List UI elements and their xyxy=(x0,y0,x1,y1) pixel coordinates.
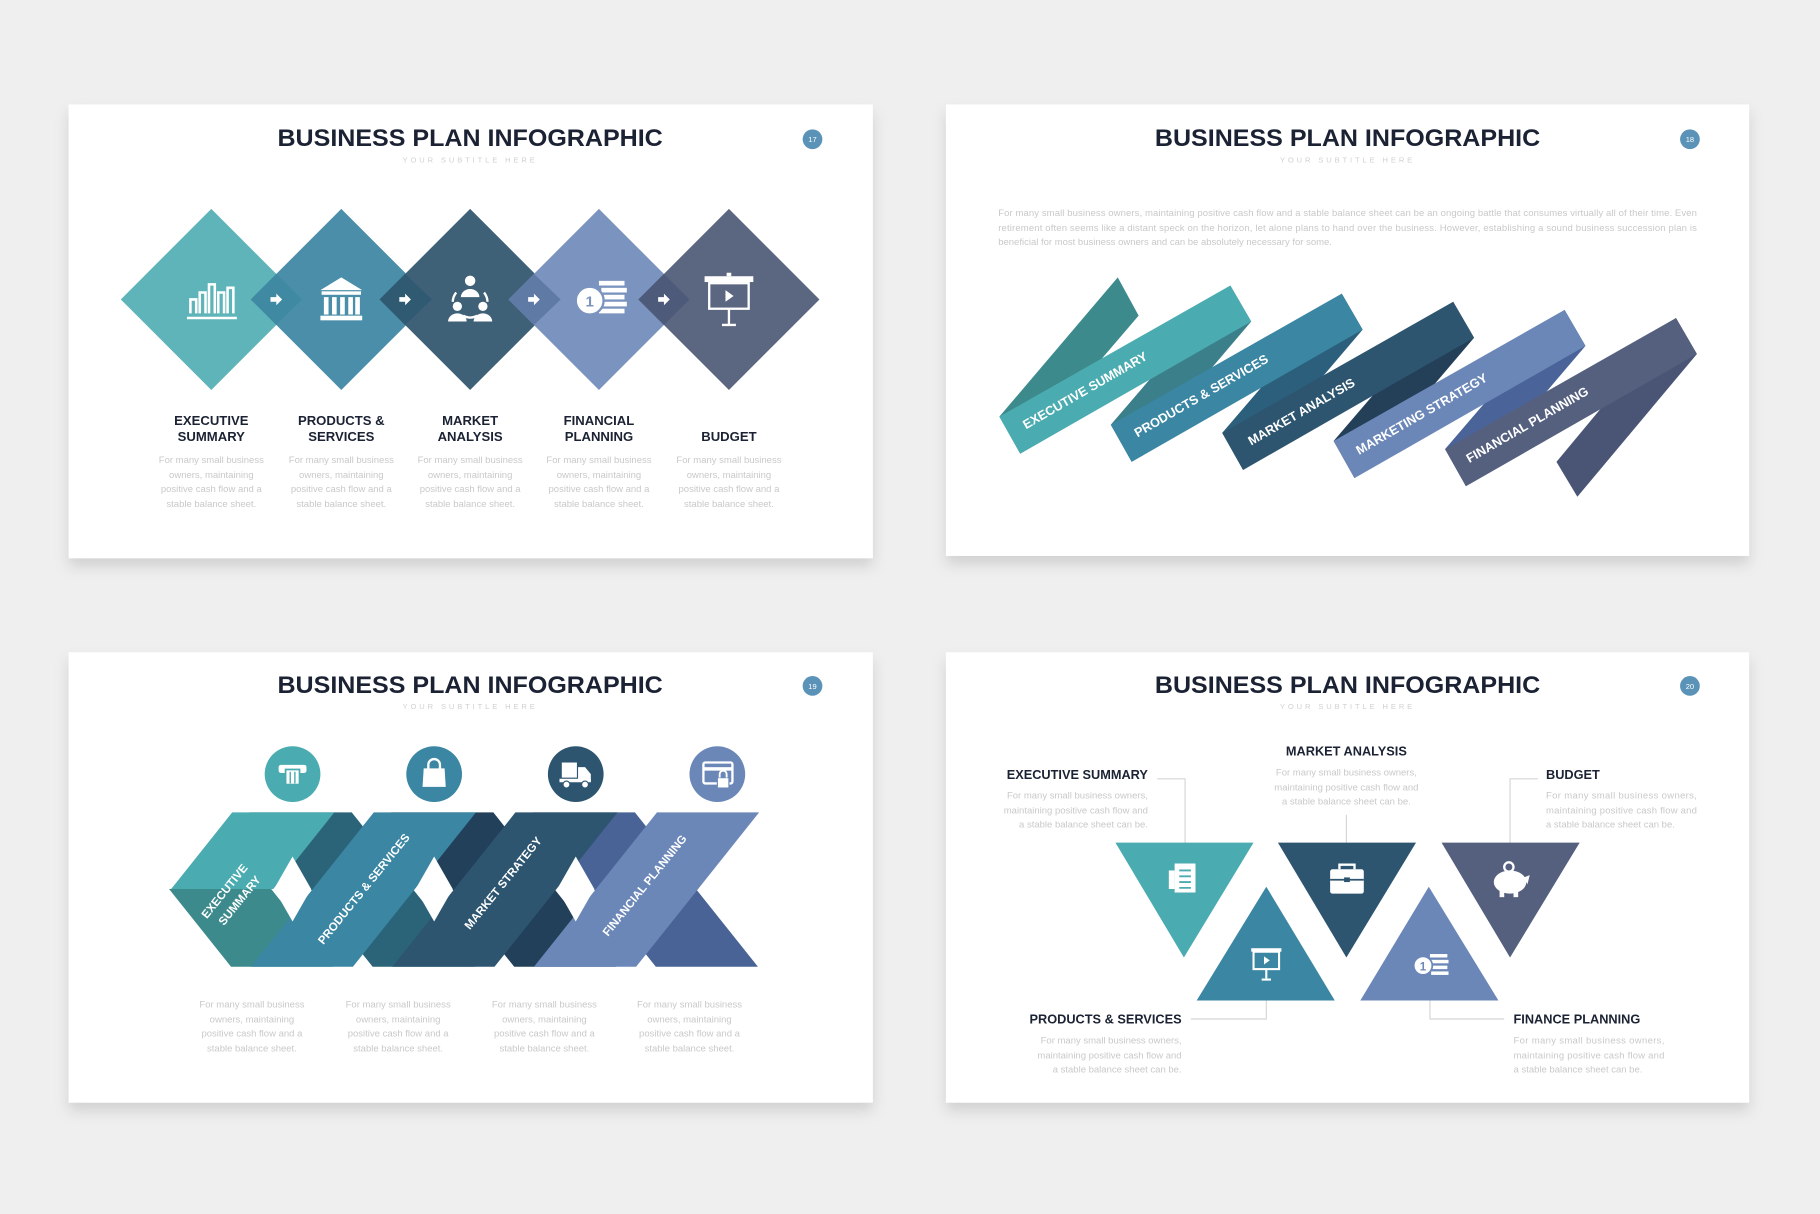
triangle: finance planning: 1 xyxy=(1420,960,1427,973)
arrows xyxy=(271,294,670,305)
label: finance planning: a stable balance sheet can be. xyxy=(1514,1064,1642,1075)
label: market analysis: a stable balance sheet can be. xyxy=(1282,796,1411,807)
label: executive summary: maintaining positive cash flow and xyxy=(1004,806,1148,817)
strip: executive summary: SUMMARY xyxy=(216,873,264,928)
title: BUSINESS PLAN INFOGRAPHIC xyxy=(277,125,663,152)
label: market analysis: MARKET ANALYSIS xyxy=(1286,744,1407,759)
panel: slide 20 triangles xyxy=(946,652,1749,1103)
step descriptions: stable balance sheet. xyxy=(425,499,515,510)
panel: slide 19 weave xyxy=(69,652,873,1103)
column descriptions: stable balance sheet. xyxy=(207,1044,297,1055)
page badge xyxy=(803,676,822,696)
column descriptions: owners, maintaining xyxy=(356,1014,440,1025)
step labels: EXECUTIVE xyxy=(174,413,249,428)
step descriptions: owners, maintaining xyxy=(428,470,512,481)
column descriptions: For many small business xyxy=(637,999,742,1010)
label: products & services: a stable balance sheet can be. xyxy=(1053,1064,1182,1075)
label: executive summary: For many small business owners, xyxy=(1007,791,1148,802)
step descriptions: For many small business xyxy=(159,455,264,466)
column descriptions: For many small business xyxy=(346,999,451,1010)
page badge: 19 xyxy=(808,682,817,691)
step descriptions: positive cash flow and a xyxy=(679,484,780,495)
ribbon: market analysis xyxy=(1222,302,1474,470)
page badge xyxy=(1680,129,1700,149)
strip: executive summary: EXECUTIVE xyxy=(199,862,251,921)
strip: market strategy xyxy=(392,812,618,967)
triangle: finance planning xyxy=(1360,887,1498,1000)
label: market analysis xyxy=(1274,744,1418,807)
step descriptions: For many small business xyxy=(289,455,394,466)
step labels: FINANCIAL xyxy=(564,413,634,428)
triangle: products & services xyxy=(1197,887,1335,1000)
column descriptions: For many small business xyxy=(492,999,597,1010)
step descriptions: stable balance sheet. xyxy=(166,499,256,510)
icon: coins: 1 xyxy=(585,293,594,310)
triangle: market analysis xyxy=(1278,843,1416,958)
intro paragraph: retirement often seems like a distant speck on the horizon, let alone plans to hand over the business. However, establishing a sound business succession plan is xyxy=(998,223,1697,234)
page badge: 20 xyxy=(1686,682,1694,691)
step descriptions: owners, maintaining xyxy=(169,470,254,481)
ribbon: marketing strategy: MARKETING STRATEGY xyxy=(1353,370,1490,458)
step labels: BUDGET xyxy=(701,429,757,444)
strip: products & services xyxy=(251,812,476,967)
column descriptions: stable balance sheet. xyxy=(500,1044,589,1055)
step descriptions: positive cash flow and a xyxy=(549,484,650,495)
subtitle: YOUR SUBTITLE HERE xyxy=(403,702,538,711)
label: budget: For many small business owners, xyxy=(1546,791,1697,802)
label: finance planning xyxy=(1514,1012,1664,1075)
step descriptions: owners, maintaining xyxy=(299,470,384,481)
label: budget xyxy=(1546,767,1697,831)
intro paragraph: beneficial for most business owners and can be absolutely necessary for some. xyxy=(998,237,1332,248)
ribbon: executive summary: EXECUTIVE SUMMARY xyxy=(1020,348,1150,432)
ribbon: marketing strategy xyxy=(1334,310,1585,478)
subtitle: YOUR SUBTITLE HERE xyxy=(1280,702,1415,711)
intro paragraph xyxy=(998,208,1697,248)
triangle: budget xyxy=(1442,843,1580,958)
page badge: 17 xyxy=(808,135,817,144)
step labels: MARKET xyxy=(442,413,498,428)
title: BUSINESS PLAN INFOGRAPHIC xyxy=(277,672,663,699)
page badge: 18 xyxy=(1686,135,1694,144)
icon: bar chart xyxy=(187,284,237,318)
label: products & services: PRODUCTS & SERVICES xyxy=(1029,1012,1182,1027)
icon circle: bag xyxy=(406,746,462,802)
label: budget: maintaining positive cash flow and xyxy=(1546,806,1697,817)
column descriptions xyxy=(199,999,742,1055)
label: market analysis: For many small business owners, xyxy=(1276,767,1417,778)
column descriptions: positive cash flow and a xyxy=(639,1028,741,1039)
step descriptions: owners, maintaining xyxy=(687,470,771,481)
panel: slide 18 ribbons xyxy=(946,104,1749,556)
strip: financial planning xyxy=(534,812,759,967)
step descriptions: owners, maintaining xyxy=(557,470,641,481)
ribbon: executive summary xyxy=(999,286,1251,454)
label: products & services: maintaining positive cash flow and xyxy=(1037,1050,1182,1061)
step labels xyxy=(174,413,757,444)
step descriptions: For many small business xyxy=(546,455,652,466)
title: BUSINESS PLAN INFOGRAPHIC xyxy=(1155,672,1540,699)
ribbon: financial planning xyxy=(1445,318,1697,486)
icon: coins xyxy=(576,281,627,315)
step descriptions: For many small business xyxy=(676,455,782,466)
step descriptions: For many small business xyxy=(418,455,523,466)
label: finance planning: FINANCE PLANNING xyxy=(1514,1012,1640,1027)
ribbon chart xyxy=(999,277,1697,497)
column descriptions: owners, maintaining xyxy=(210,1014,294,1025)
intro paragraph: For many small business owners, maintaining positive cash flow and a stable balance sheet can be an ongoing battle that consumes virtually all of their time. Even xyxy=(998,208,1697,219)
label: executive summary xyxy=(1004,767,1148,831)
ribbon: products & services: PRODUCTS & SERVICES xyxy=(1131,351,1271,440)
column descriptions: stable balance sheet. xyxy=(353,1044,443,1055)
page badge xyxy=(803,129,822,149)
label: executive summary: EXECUTIVE SUMMARY xyxy=(1007,767,1148,782)
step descriptions: stable balance sheet. xyxy=(296,499,386,510)
column descriptions: positive cash flow and a xyxy=(494,1028,596,1039)
label: market analysis: maintaining positive cash flow and xyxy=(1274,782,1418,793)
step labels: ANALYSIS xyxy=(438,429,503,444)
step descriptions: stable balance sheet. xyxy=(684,499,774,510)
ribbon: financial planning: FINANCIAL PLANNING xyxy=(1463,383,1591,466)
ribbon: products & services xyxy=(1111,294,1363,462)
step descriptions xyxy=(159,455,782,510)
panel: slide 17 diamonds xyxy=(69,104,873,558)
page badge xyxy=(1680,676,1700,696)
column descriptions: owners, maintaining xyxy=(647,1014,732,1025)
strip: executive summary xyxy=(171,812,334,925)
column descriptions: owners, maintaining xyxy=(502,1014,587,1025)
triangle: executive summary xyxy=(1115,843,1254,958)
subtitle: YOUR SUBTITLE HERE xyxy=(1280,155,1415,164)
icon circle: truck xyxy=(548,746,604,802)
subtitle: YOUR SUBTITLE HERE xyxy=(403,155,538,164)
title: BUSINESS PLAN INFOGRAPHIC xyxy=(1155,125,1540,152)
connector lines xyxy=(1157,779,1538,1019)
column descriptions: For many small business xyxy=(199,999,305,1010)
strip: products & services: PRODUCTS & SERVICES xyxy=(316,831,413,947)
label: products & services: For many small business owners, xyxy=(1041,1035,1182,1046)
strip: financial planning: FINANCIAL PLANNING xyxy=(600,833,690,939)
icon circle: atm xyxy=(265,746,320,802)
step descriptions: positive cash flow and a xyxy=(291,484,392,495)
woven strips xyxy=(108,812,759,967)
icon circle: card lock xyxy=(689,746,745,802)
ribbon: market analysis: MARKET ANALYSIS xyxy=(1245,375,1357,448)
column descriptions: positive cash flow and a xyxy=(348,1028,449,1039)
diamond chain xyxy=(121,209,819,390)
icon: team xyxy=(448,276,492,321)
icon: presentation board xyxy=(705,273,753,325)
label: finance planning: maintaining positive cash flow and xyxy=(1514,1050,1664,1061)
step labels: PRODUCTS & xyxy=(298,413,385,428)
column descriptions: positive cash flow and a xyxy=(201,1028,303,1039)
label: products & services xyxy=(1029,1012,1182,1075)
step labels: SUMMARY xyxy=(178,429,245,444)
label: executive summary: a stable balance sheet can be. xyxy=(1019,820,1148,831)
label: budget: BUDGET xyxy=(1546,767,1600,782)
step descriptions: positive cash flow and a xyxy=(420,484,521,495)
step labels: PLANNING xyxy=(565,429,633,444)
label: budget: a stable balance sheet can be. xyxy=(1546,820,1675,831)
icon: bank xyxy=(320,277,362,320)
step descriptions: positive cash flow and a xyxy=(161,484,262,495)
column descriptions: stable balance sheet. xyxy=(645,1044,734,1055)
step descriptions: stable balance sheet. xyxy=(554,499,644,510)
strip: market strategy: MARKET STRATEGY xyxy=(462,834,545,932)
label: finance planning: For many small business owners, xyxy=(1514,1035,1664,1046)
step labels: SERVICES xyxy=(308,429,375,444)
